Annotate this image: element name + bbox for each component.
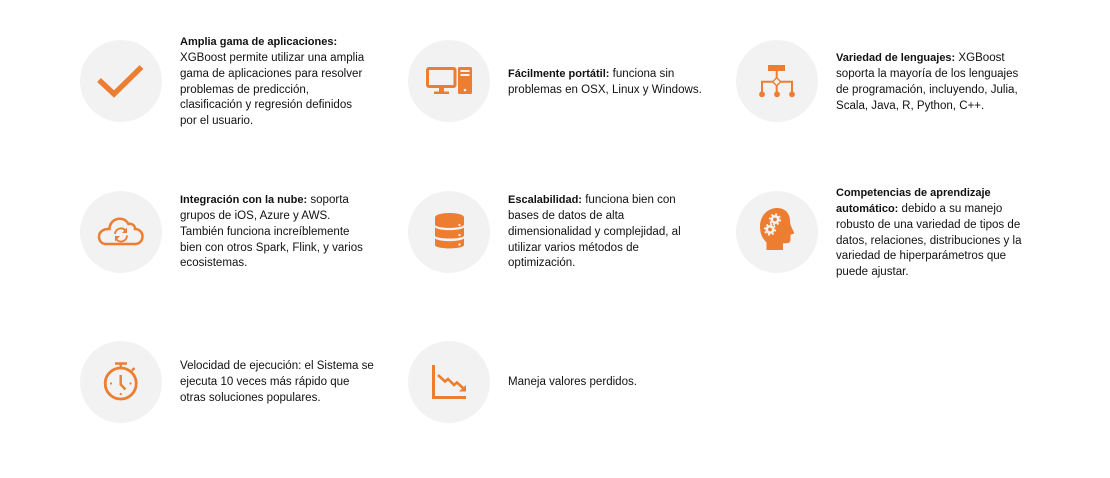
text: aprendizaje automático: robusto de una variedad de tipos de <box>836 219 1020 231</box>
text: aplicaciones <box>180 36 364 127</box>
text: velocidad <box>180 360 374 404</box>
text: escalabilidad: Escalabilidad: funciona bien con <box>508 194 676 206</box>
text: nube <box>180 194 363 269</box>
text: aplicaciones: problemas de predicción, <box>180 84 309 96</box>
text: portátil <box>508 68 702 96</box>
text: lenguajes: Scala, Java, R, Python, C++. <box>836 100 984 112</box>
text: nube: grupos de iOS, Azure y AWS. <box>180 210 330 222</box>
icon: head with gears <box>736 191 818 273</box>
text: aplicaciones: por el usuario. <box>180 115 253 127</box>
text: aplicaciones: XGBoost permite utilizar una amplia <box>180 52 364 64</box>
icon: computer <box>408 40 490 122</box>
text: escalabilidad: dimensionalidad y complejidad, al <box>508 226 681 238</box>
text: velocidad: Velocidad de ejecución: el Sistema se <box>180 360 374 372</box>
text: aprendizaje automático: Competencias de aprendizaje <box>836 187 991 199</box>
icon: database <box>408 191 490 273</box>
text: velocidad: otras soluciones populares. <box>180 392 321 404</box>
icon: cloud sync <box>80 191 162 273</box>
text: lenguajes: de programación, incluyendo, Julia, <box>836 84 1018 96</box>
text: portátil: problemas en OSX, Linux y Windows. <box>508 84 702 96</box>
text: nube: ecosistemas. <box>180 257 247 269</box>
text: portátil: Fácilmente portátil: funciona sin <box>508 68 674 80</box>
text: escalabilidad: optimización. <box>508 257 575 269</box>
icon: stopwatch <box>80 341 162 423</box>
text: aplicaciones: clasificación y regresión definidos <box>180 99 352 111</box>
text: lenguajes: Variedad de lenguajes: XGBoost <box>836 52 1005 64</box>
panel: lenguajes <box>736 40 1018 122</box>
panel: aprendizaje automático <box>736 187 1022 278</box>
panel: valores perdidos <box>408 341 637 423</box>
panel: escalabilidad <box>408 191 681 273</box>
panel: velocidad <box>80 341 374 423</box>
panel: nube <box>80 191 363 273</box>
text: valores perdidos: Maneja valores perdidos. <box>508 376 637 388</box>
text: nube: También funciona increíblemente <box>180 226 349 238</box>
text: aprendizaje automático: automático: debido a su manejo <box>836 203 1002 215</box>
text: lenguajes <box>836 52 1018 112</box>
text: aplicaciones: Amplia gama de aplicaciones: <box>180 36 337 48</box>
text: lenguajes: soporta la mayoría de los lenguajes <box>836 68 1018 80</box>
text: aprendizaje automático: datos, relaciones, distribuciones y la <box>836 235 1022 247</box>
text: nube: Integración con la nube: soporta <box>180 194 349 206</box>
text: aprendizaje automático <box>836 187 1022 278</box>
panel: aplicaciones <box>80 36 364 127</box>
text: escalabilidad: utilizar varios métodos de <box>508 242 639 254</box>
text: aprendizaje automático: puede ajustar. <box>836 266 909 278</box>
text: escalabilidad: bases de datos de alta <box>508 210 624 222</box>
text: velocidad: ejecuta 10 veces más rápido que <box>180 376 349 388</box>
icon: hierarchy <box>736 40 818 122</box>
icon: declining chart <box>408 341 490 423</box>
text: nube: bien con otros Spark, Flink, y varios <box>180 242 363 254</box>
text: aplicaciones: gama de aplicaciones para resolver <box>180 68 362 80</box>
text: escalabilidad <box>508 194 681 269</box>
text: aprendizaje automático: variedad de hiperparámetros que <box>836 250 1006 262</box>
icon: check mark <box>80 40 162 122</box>
panel: portátil <box>408 40 702 122</box>
